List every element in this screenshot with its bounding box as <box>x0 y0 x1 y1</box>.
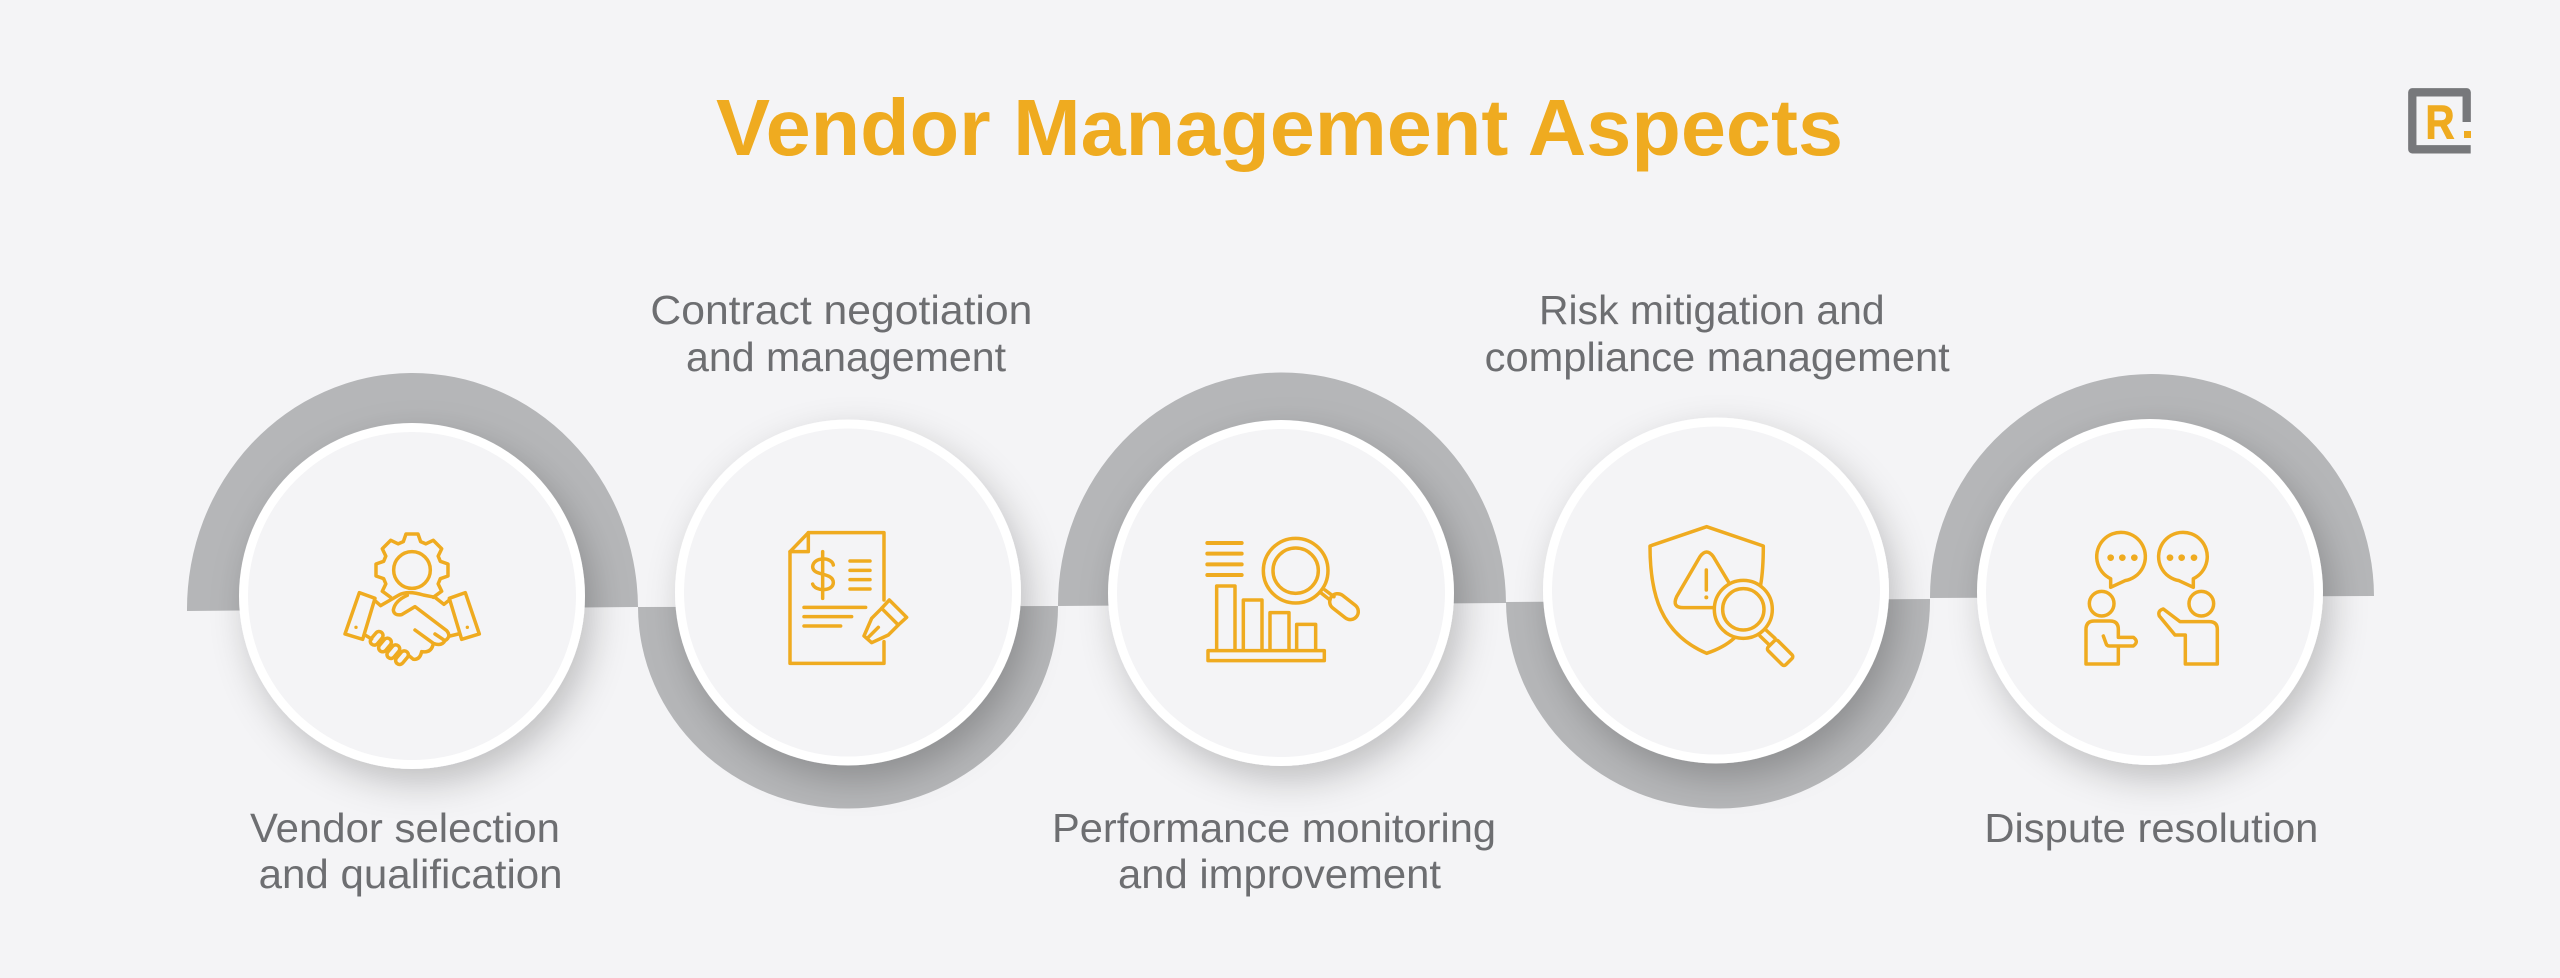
panel: performance monitoring and improvement <box>1052 372 1506 897</box>
circle 5 <box>1977 419 2323 765</box>
upper arc 1 <box>187 373 638 611</box>
title: Vendor Management Aspects <box>716 83 1843 172</box>
label 1: and qualification <box>259 851 563 897</box>
label 3 <box>1052 805 1496 897</box>
logo <box>2412 92 2471 149</box>
icon: shield with warning and magnifier <box>1650 527 1794 667</box>
logo: R <box>2426 96 2454 148</box>
circle 3 <box>1108 420 1454 766</box>
label 4 <box>1485 287 1950 380</box>
circle 4 <box>1543 418 1889 764</box>
panel: contract negotiation and management <box>638 287 1058 809</box>
label 1 <box>250 805 563 897</box>
circle 2 <box>675 420 1021 766</box>
icon: handshake with gear <box>345 534 479 666</box>
label 2 <box>650 287 1032 380</box>
label 4: compliance management <box>1485 334 1950 380</box>
lower arc 2 <box>638 606 1058 809</box>
label 3: Performance monitoring <box>1052 805 1496 851</box>
label 4: Risk mitigation and <box>1539 287 1885 333</box>
label 1: Vendor selection <box>250 805 560 851</box>
lower arc 4 <box>1506 599 1930 809</box>
icon: contract document with pen <box>790 533 907 663</box>
upper arc 5 <box>1930 374 2374 598</box>
label 5: Dispute resolution <box>1984 805 2318 851</box>
label 2: Contract negotiation <box>650 287 1032 333</box>
icon: bar chart with magnifier <box>1207 538 1362 661</box>
icon: two people talking <box>2086 532 2217 664</box>
circle 1 <box>239 423 585 769</box>
panel: vendor selection and qualification <box>187 373 638 897</box>
label 2: and management <box>686 334 1007 380</box>
upper arc 3 <box>1058 372 1506 606</box>
label 3: and improvement <box>1118 851 1442 897</box>
panel: dispute resolution <box>1930 374 2374 851</box>
panel: risk mitigation and compliance management <box>1485 287 1950 809</box>
